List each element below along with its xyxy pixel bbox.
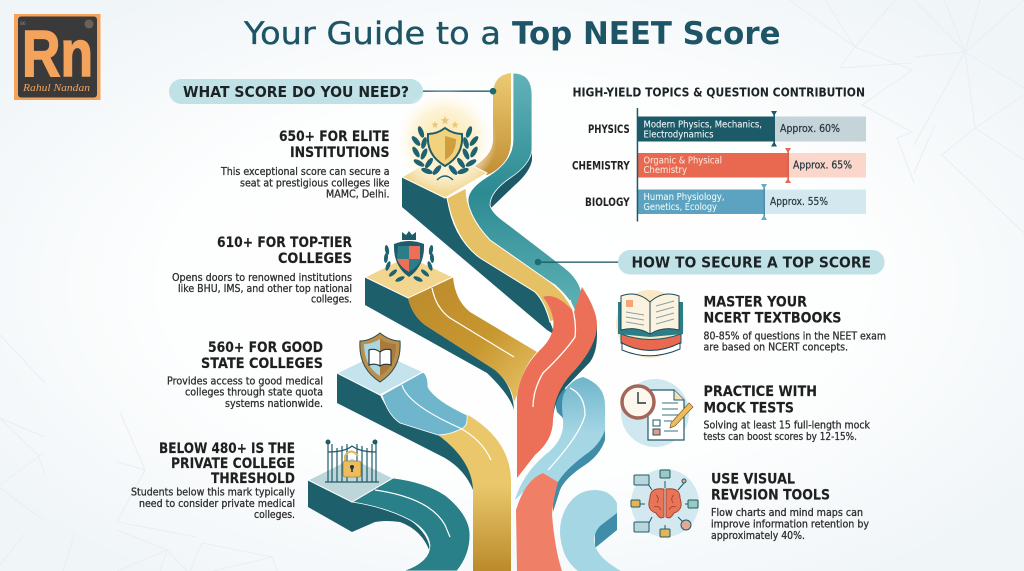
block: below 480: need to consider private medical bbox=[139, 498, 295, 510]
logo: 86 bbox=[20, 21, 26, 27]
row: physics: Modern Physics, Mechanics, bbox=[644, 120, 762, 130]
block: master NCERT bbox=[704, 295, 886, 354]
connector: road to secure pill bbox=[535, 259, 618, 265]
row: biology: BIOLOGY bbox=[585, 195, 630, 209]
ribbon: blue middle strand bbox=[515, 377, 605, 512]
pill heading: how to secure bbox=[618, 250, 884, 274]
block: 650+: MAMC, Delhi. bbox=[326, 188, 390, 200]
ribbon: coral strand bbox=[516, 287, 597, 571]
title bbox=[243, 16, 781, 52]
chart heading: HIGH-YIELD TOPICS & QUESTION CONTRIBUTION bbox=[572, 86, 865, 100]
block: below 480: Students below this mark typically bbox=[131, 486, 295, 498]
icon: brain mind map bbox=[631, 469, 699, 537]
row: physics: Electrodynamics bbox=[644, 130, 714, 140]
block: 560+: 560+ FOR GOOD bbox=[208, 340, 323, 356]
block: visual tools: Flow charts and mind maps can bbox=[711, 507, 863, 519]
row: chemistry: CHEMISTRY bbox=[572, 159, 630, 173]
block: mock tests: MOCK TESTS bbox=[704, 400, 794, 416]
row: biology bbox=[585, 184, 866, 220]
block: visual tools: approximately 40%. bbox=[711, 530, 805, 542]
block: mock tests: tests can boost scores by 12-15%. bbox=[704, 431, 857, 443]
block: master NCERT: are based on NCERT concepts. bbox=[704, 342, 848, 354]
block: 650+: 650+ FOR ELITE bbox=[279, 129, 390, 145]
block: below 480 bbox=[131, 441, 295, 521]
title: Top NEET Score bbox=[512, 16, 780, 52]
row: chemistry: Chemistry bbox=[644, 165, 687, 176]
block: visual tools bbox=[711, 471, 869, 542]
block: mock tests: Solving at least 15 full-length mock bbox=[704, 420, 871, 432]
row: chemistry: Organic & Physical bbox=[644, 156, 722, 166]
block: 650+ bbox=[220, 129, 390, 200]
logo: Rn bbox=[22, 16, 93, 90]
block: 610+ bbox=[172, 235, 352, 306]
block: 610+: like BHU, IMS, and other top national bbox=[178, 283, 352, 295]
icon: clock and test paper bbox=[621, 379, 693, 447]
block: 650+: INSTITUTIONS bbox=[290, 145, 390, 161]
block: below 480: PRIVATE COLLEGE bbox=[171, 456, 295, 472]
block: master NCERT: NCERT TEXTBOOKS bbox=[704, 311, 842, 327]
row: biology: Human Physiology, bbox=[644, 192, 724, 203]
block: below 480: BELOW 480+ IS THE bbox=[159, 441, 295, 457]
icon: top-tier crest bbox=[384, 231, 434, 283]
row: biology: Approx. 55% bbox=[770, 196, 828, 208]
ribbon: gold second tier bbox=[365, 256, 537, 410]
ribbon: top gold and teal bbox=[402, 73, 582, 335]
bar chart: question contribution bbox=[572, 108, 866, 222]
connector: score pill to road bbox=[423, 88, 496, 94]
pathway ribbons bbox=[308, 73, 621, 571]
pill heading: how to secure: HOW TO SECURE A TOP SCORE bbox=[632, 254, 871, 272]
block: 650+: This exceptional score can secure a bbox=[220, 166, 390, 178]
block: visual tools: USE VISUAL bbox=[711, 471, 795, 487]
ribbon: blue third tier bbox=[337, 352, 511, 571]
block: visual tools: improve information retention by bbox=[711, 518, 869, 530]
block: 560+: systems nationwide. bbox=[225, 398, 323, 410]
block: 610+: COLLEGES bbox=[278, 251, 352, 267]
icon: open textbooks bbox=[616, 290, 684, 358]
block: below 480: THRESHOLD bbox=[211, 471, 295, 487]
title: Your Guide to a bbox=[243, 16, 501, 52]
block: 610+: Opens doors to renowned institutions bbox=[172, 272, 352, 284]
block: 560+: colleges through state quota bbox=[185, 386, 323, 398]
block: 560+ bbox=[167, 340, 323, 410]
row: physics: PHYSICS bbox=[588, 122, 630, 136]
block: below 480: colleges. bbox=[254, 509, 295, 521]
block: 650+: seat at prestigious colleges like bbox=[240, 178, 390, 190]
block: visual tools: REVISION TOOLS bbox=[711, 487, 830, 503]
logo: Rahul Nandan bbox=[22, 83, 90, 94]
icon: state college shield with book bbox=[360, 333, 400, 382]
block: 560+: Provides access to good medical bbox=[167, 376, 323, 388]
row: chemistry: Approx. 65% bbox=[793, 160, 852, 172]
block: 610+: 610+ FOR TOP-TIER bbox=[217, 235, 352, 251]
block: mock tests: PRACTICE WITH bbox=[704, 384, 817, 400]
block: master NCERT: 80-85% of questions in the NEET exam bbox=[704, 330, 886, 342]
ribbon: teal fourth tier bbox=[308, 458, 470, 571]
pill heading: what score bbox=[169, 79, 423, 104]
block: mock tests bbox=[704, 384, 871, 443]
block: 560+: STATE COLLEGES bbox=[201, 356, 323, 372]
icon: gate with padlock bbox=[325, 440, 379, 482]
block: master NCERT: MASTER YOUR bbox=[704, 295, 807, 311]
row: physics bbox=[588, 111, 866, 146]
block: 610+: colleges. bbox=[311, 294, 352, 306]
row: chemistry bbox=[572, 148, 866, 183]
row: physics: Approx. 60% bbox=[780, 123, 840, 135]
pill heading: what score: WHAT SCORE DO YOU NEED? bbox=[183, 83, 409, 101]
row: biology: Genetics, Ecology bbox=[644, 202, 717, 213]
ribbon: bottom blue bbox=[560, 490, 621, 571]
icon: elite shield with laurels bbox=[393, 88, 497, 192]
